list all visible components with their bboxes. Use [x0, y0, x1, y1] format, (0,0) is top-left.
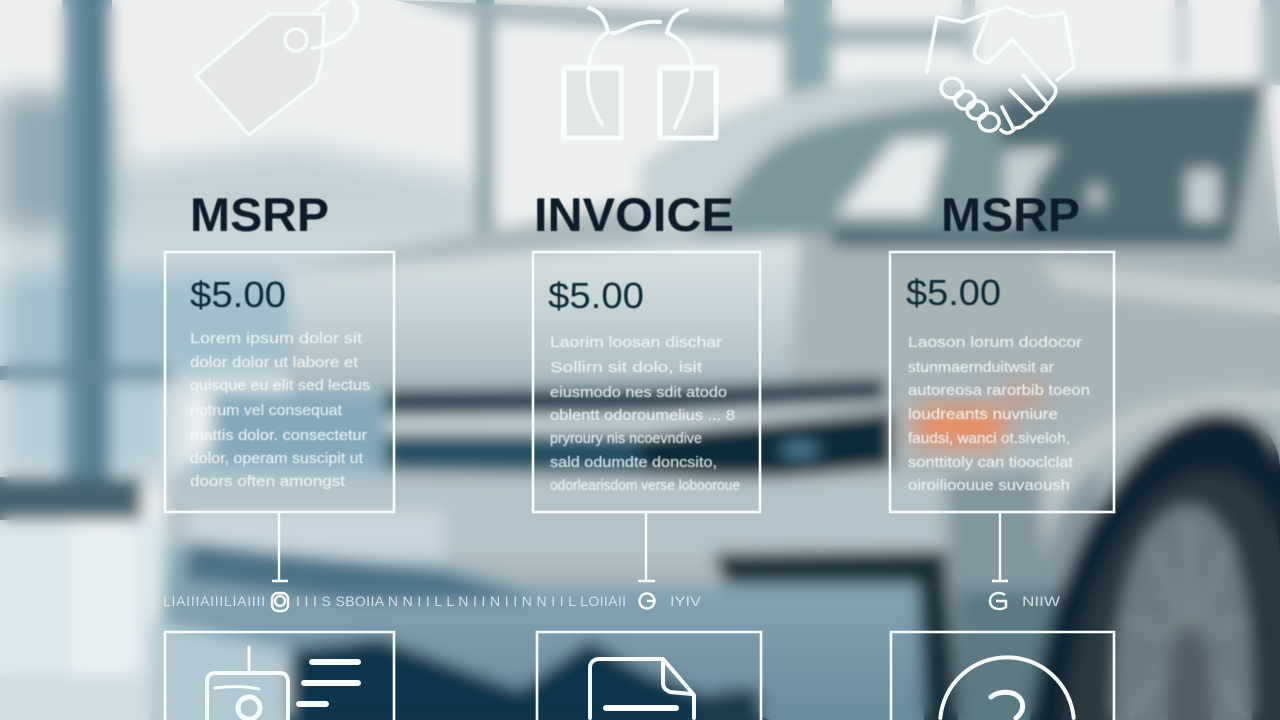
body text: dolor, operam suscipit ut	[190, 450, 364, 467]
small caption row: IYIV	[670, 593, 702, 609]
body text: oblentt odoroumelius ... 8	[550, 407, 735, 424]
connector	[638, 513, 655, 581]
panel: document card	[537, 632, 761, 720]
body text: mattis dolor. consectetur	[190, 427, 367, 444]
icon: two receipts	[564, 8, 716, 138]
icon: small circle	[640, 594, 654, 608]
icon: small circle	[990, 593, 1006, 609]
panel: question card	[891, 632, 1114, 720]
body text: eiusmodo nes sdit atodo	[550, 384, 727, 401]
body text	[908, 334, 1090, 494]
heading: MSRP: MSRP	[190, 188, 329, 241]
icon: ID badge	[207, 647, 358, 719]
price: $5.00	[190, 274, 286, 315]
body text: Lorem ipsum dolor sit	[190, 330, 363, 347]
panel: invoice details	[533, 252, 760, 512]
body text: odorlearisdom verse lobooroue	[550, 477, 740, 494]
body text: stunmaernduitwsit ar	[908, 359, 1054, 376]
panel: negotiated details	[890, 252, 1114, 512]
body text: faudsi, wanci ot.siveloh,	[908, 430, 1070, 447]
column: MSRP	[165, 1, 394, 581]
small caption row	[163, 593, 1061, 611]
panel: ID badge card	[165, 632, 394, 720]
price: $5.00	[548, 275, 644, 316]
small caption row: NIIW	[1022, 593, 1061, 609]
body text: sald odumdte doncsito,	[550, 454, 717, 471]
body text	[550, 334, 740, 494]
body text: Laorim loosan dischar	[550, 334, 722, 351]
column: INVOICE	[533, 8, 760, 581]
column: negotiated MSRP	[890, 7, 1114, 581]
body text: doors often amongst	[190, 473, 346, 490]
icon: small circle	[272, 593, 288, 611]
body text: dolor dolor ut labore et	[190, 354, 359, 371]
price: $5.00	[906, 272, 1001, 313]
small caption row: LIAIIIAIIILIAIIII	[163, 593, 265, 609]
body text: pryroury nis ncoevndive	[550, 430, 702, 447]
panel: MSRP details	[165, 252, 394, 512]
body text: quisque eu elit sed lectus	[190, 377, 370, 394]
body text: autoreosa rarorbib toeon	[908, 382, 1090, 399]
body text: notrum vel consequat	[190, 402, 343, 419]
heading: MSRP: MSRP	[941, 188, 1080, 241]
icon: question mark circle	[940, 657, 1074, 718]
connector	[272, 513, 288, 581]
body text: sonttitoly can tiooclclat	[908, 454, 1074, 471]
small caption row: I I I S SBOIIA N N I I L L N I I N I I N N I I L LOIIAII	[296, 593, 626, 609]
heading: INVOICE: INVOICE	[534, 188, 734, 241]
icon: handshake	[927, 7, 1074, 133]
connector	[992, 513, 1008, 581]
icon: price tag	[196, 1, 357, 135]
body text: Sollirn sit dolo, isit	[550, 359, 703, 376]
icon: document	[590, 659, 694, 718]
body text: oiroilioouue suvaoush	[908, 477, 1070, 494]
body text: loudreants nuvniure	[908, 406, 1058, 423]
body text: Laoson lorum dodocor	[908, 334, 1082, 351]
body text	[190, 330, 370, 490]
